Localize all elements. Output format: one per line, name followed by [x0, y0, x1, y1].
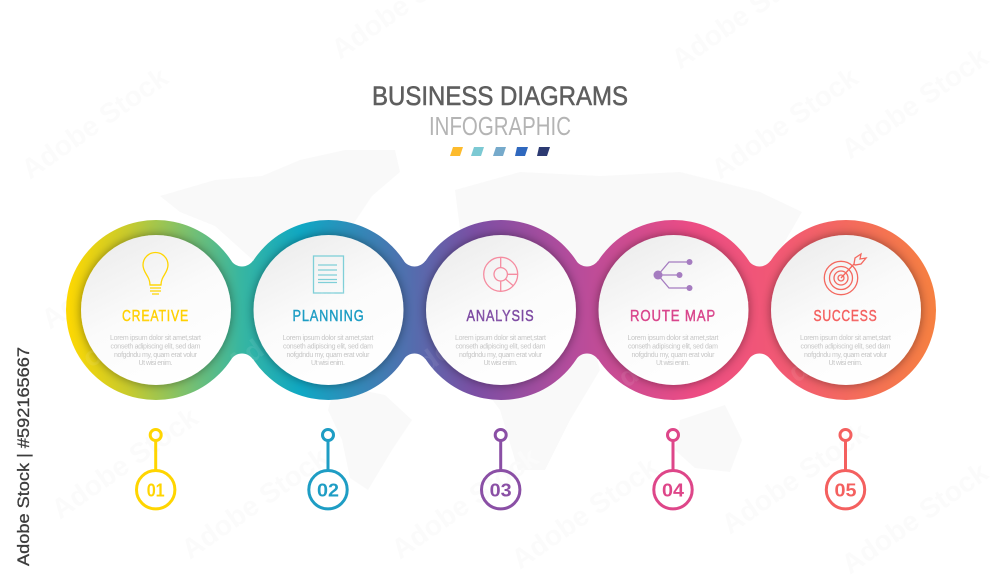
- marker 02: [309, 430, 347, 509]
- watermark overlay on band: Adobe Stock: [221, 256, 379, 380]
- marker 03: [482, 430, 520, 509]
- icon: donut chart: [484, 257, 518, 291]
- panel: analysis: [426, 235, 576, 385]
- watermark pattern: Adobe Stock: [836, 41, 994, 165]
- watermark overlay on band: Adobe Stock: [596, 281, 754, 405]
- description: Ut wisi enim.: [828, 360, 863, 367]
- description: nofgdndu my, quam erat volur: [459, 352, 543, 359]
- description: Lorem ipsum dolor sit amet,start: [110, 335, 201, 342]
- description: conseth adipiscing elit, sed dam: [456, 344, 546, 350]
- watermark pattern: Adobe Stock: [706, 61, 864, 185]
- description: conseth adipiscing elit, sed dam: [283, 344, 373, 350]
- marker 05: 05: [834, 480, 856, 500]
- description: [800, 335, 891, 367]
- description: Ut wisi enim.: [311, 360, 345, 367]
- panel: route map: [598, 235, 748, 385]
- colour dashes: [450, 147, 550, 156]
- description: Ut wisi enim.: [138, 360, 173, 367]
- watermark pattern: Adobe Stock: [36, 211, 194, 335]
- label: ROUTE MAP: [630, 308, 716, 325]
- marker 01: 01: [147, 480, 165, 500]
- description: nofgdndu my, quam erat volur: [804, 352, 888, 359]
- watermark pattern: Adobe Stock: [46, 401, 204, 525]
- watermark pattern: Adobe Stock: [836, 456, 994, 580]
- description: [282, 335, 374, 367]
- watermark pattern: Adobe Stock: [506, 451, 664, 575]
- panel: creative: [81, 235, 231, 385]
- marker 03: 03: [490, 480, 512, 500]
- label: ANALYSIS: [466, 308, 534, 325]
- description: Ut wisi enim.: [656, 360, 690, 367]
- watermark overlay on band: Adobe Stock: [766, 276, 924, 400]
- description: conseth adipiscing elit, sed dam: [110, 344, 201, 350]
- label: CREATIVE: [122, 308, 189, 325]
- description: nofgdndu my, quam erat volur: [632, 352, 715, 359]
- description: Lorem ipsum dolor sit amet,start: [800, 335, 891, 342]
- description: [455, 335, 546, 367]
- marker 04: 04: [662, 480, 684, 500]
- description: nofgdndu my, quam erat volur: [286, 352, 370, 359]
- watermark pattern: Adobe Stock: [176, 441, 334, 565]
- icon: route branches: [654, 259, 692, 291]
- subheading: infographic: INFOGRAPHIC: [429, 111, 571, 141]
- heading: business diagrams: BUSINESS DIAGRAMS: [372, 81, 628, 111]
- description: nofgdndu my, quam erat volur: [114, 352, 198, 359]
- description: Ut wisi enim.: [484, 360, 518, 367]
- watermark overlay on band: [46, 256, 924, 405]
- icon: document: [314, 256, 344, 293]
- watermark overlay on band: Adobe Stock: [46, 271, 204, 395]
- panel: success: [771, 235, 921, 385]
- description: conseth adipiscing elit, sed dam: [628, 344, 718, 350]
- marker 04: [654, 430, 692, 509]
- icon: light bulb: [143, 252, 168, 294]
- description: [110, 335, 201, 367]
- title: [372, 81, 628, 141]
- marker 01: [136, 430, 175, 509]
- marker 02: 02: [317, 480, 339, 500]
- description: Lorem ipsum dolor sit amet,start: [628, 335, 719, 342]
- description: conseth adipiscing elit, sed dam: [800, 344, 891, 350]
- watermark pattern: Adobe Stock: [716, 416, 874, 540]
- label: PLANNING: [292, 308, 364, 325]
- description: [628, 335, 719, 367]
- description: Lorem ipsum dolor sit amet,start: [455, 335, 546, 342]
- panel: planning: [254, 235, 404, 385]
- watermark pattern: Adobe Stock: [386, 441, 544, 565]
- watermark overlay on band: Adobe Stock: [396, 266, 554, 390]
- connected gradient ring band: [66, 220, 936, 400]
- description: Lorem ipsum dolor sit amet,start: [282, 335, 374, 342]
- watermark pattern: Adobe Stock: [16, 61, 174, 185]
- label: SUCCESS: [814, 308, 878, 325]
- marker 05: [826, 430, 865, 509]
- icon: target with arrow: [824, 254, 866, 295]
- background world map: [160, 150, 802, 490]
- stock id side text: Adobe Stock | #592165667: [14, 347, 33, 566]
